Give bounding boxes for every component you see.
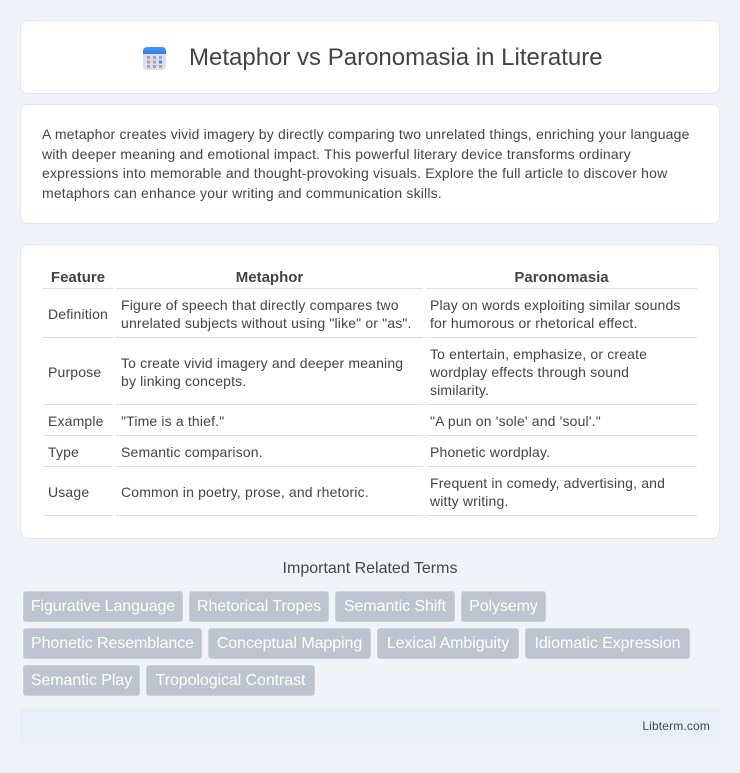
row: example: Example [48, 413, 104, 429]
intro text panel [20, 104, 720, 224]
row: purpose: Purpose [48, 364, 101, 380]
intro paragraph: with deeper meaning and emotional impact. This powerful literary device transforms ordinary [42, 146, 631, 162]
row: type [48, 444, 550, 460]
row: definition: unrelated subjects without using "like" or "as". [121, 315, 412, 331]
row: type: Semantic comparison. [121, 444, 263, 460]
comparison table panel [20, 244, 720, 539]
row: definition [48, 297, 681, 331]
footer credit: Libterm.com [642, 719, 710, 733]
row: definition: Figure of speech that directly compares two [121, 297, 399, 313]
related terms tags: Lexical Ambiguity [387, 635, 509, 652]
row: usage [48, 475, 665, 509]
table header: Paronomasia [514, 269, 609, 286]
related terms tags: Polysemy [469, 598, 538, 615]
related terms tags: Tropological Contrast [156, 672, 305, 689]
related terms tags: Idiomatic Expression [534, 635, 681, 652]
related terms tags: Conceptual Mapping [217, 635, 362, 652]
intro paragraph: metaphors can enhance your writing and communication skills. [42, 184, 442, 200]
row: purpose [48, 346, 647, 398]
related terms tags: Semantic Shift [344, 598, 446, 615]
row: example: "Time is a thief." [121, 413, 224, 429]
intro paragraph [42, 126, 690, 201]
table header: Feature [51, 269, 105, 286]
related terms tags: Rhetorical Tropes [197, 598, 321, 615]
related terms heading: Important Related Terms [283, 560, 457, 577]
intro paragraph: expressions into memorable and thought-provoking visuals. Explore the full article to discover how [42, 165, 667, 181]
header panel [20, 20, 720, 94]
row: purpose: wordplay effects through sound [430, 364, 629, 380]
row: type: Type [48, 444, 79, 460]
row: type: Phonetic wordplay. [430, 444, 550, 460]
row: usage: Usage [48, 484, 89, 500]
table header [51, 269, 609, 286]
row: purpose: similarity. [430, 382, 489, 398]
row: usage: Frequent in comedy, advertising, and [430, 475, 665, 491]
related terms tags: Semantic Play [31, 672, 132, 689]
footer bar [20, 709, 720, 743]
icon: calendar [143, 47, 166, 70]
row: purpose: To create vivid imagery and deeper meaning [121, 355, 403, 371]
row: example [48, 413, 601, 429]
related terms tags [23, 591, 690, 696]
table header: Metaphor [236, 269, 303, 286]
row: definition: Definition [48, 306, 108, 322]
row: definition: Play on words exploiting similar sounds [430, 297, 681, 313]
title: Metaphor vs Paronomasia in Literature [189, 44, 603, 71]
related terms tags: Figurative Language [31, 598, 175, 615]
row: purpose: To entertain, emphasize, or create [430, 346, 647, 362]
row: example: "A pun on 'sole' and 'soul'." [430, 413, 601, 429]
row: usage: Common in poetry, prose, and rhetoric. [121, 484, 369, 500]
row: usage: witty writing. [430, 493, 508, 509]
row: purpose: by linking concepts. [121, 373, 246, 389]
row: definition: for humorous or rhetorical effect. [430, 315, 638, 331]
intro paragraph: A metaphor creates vivid imagery by directly comparing two unrelated things, enriching your language [42, 126, 690, 142]
related terms tags: Phonetic Resemblance [31, 635, 194, 652]
